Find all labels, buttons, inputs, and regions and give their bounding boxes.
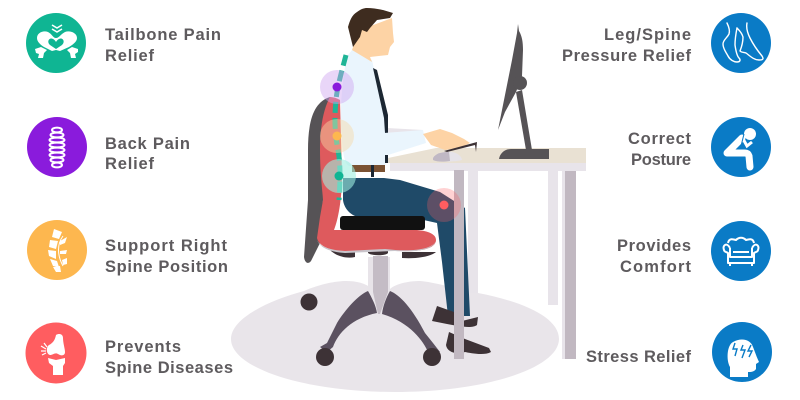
label: Back Pain Relief: Back Pain xyxy=(105,135,190,153)
label: Leg/Spine Pressure Relief: Leg/Spine xyxy=(604,26,691,44)
icon: knee joint xyxy=(26,322,86,384)
icon: feet outlines xyxy=(711,13,771,73)
label: Support Right Spine Position: Spine Position xyxy=(105,258,228,276)
label: Support Right Spine Position xyxy=(105,237,228,276)
label: Prevents Spine Diseases xyxy=(105,338,233,377)
icon: pelvis xyxy=(26,13,86,73)
illustration: office chair xyxy=(300,97,441,366)
illustration: front desk leg xyxy=(454,170,464,359)
icon: sofa xyxy=(711,221,771,281)
panel: prevents spine diseases xyxy=(26,322,233,384)
label: Leg/Spine Pressure Relief xyxy=(562,26,692,65)
marker: upper back xyxy=(320,70,354,104)
panel: correct posture xyxy=(628,117,771,177)
label: Prevents Spine Diseases: Spine Diseases xyxy=(105,359,233,377)
marker: mid back xyxy=(320,119,354,153)
label: Tailbone Pain Relief: Tailbone Pain xyxy=(105,26,221,44)
label: Provides Comfort: Provides xyxy=(617,237,691,255)
label: Provides Comfort: Comfort xyxy=(620,258,692,276)
label: Provides Comfort xyxy=(617,237,692,276)
label: Tailbone Pain Relief xyxy=(105,26,221,65)
label: Leg/Spine Pressure Relief: Pressure Relief xyxy=(562,47,692,65)
illustration: desk xyxy=(388,148,586,359)
panel: leg/spine pressure relief xyxy=(562,13,771,73)
illustration: monitor xyxy=(498,24,549,159)
label: Back Pain Relief xyxy=(105,135,190,173)
panel: provides comfort xyxy=(617,221,771,281)
label: Correct Posture xyxy=(628,130,692,169)
illustration: spine dashed line xyxy=(335,55,346,200)
illustration: seated man xyxy=(340,8,491,354)
label: Tailbone Pain Relief: Relief xyxy=(105,47,154,65)
icon: head with lightning xyxy=(712,322,772,382)
label: Correct Posture: Correct xyxy=(628,130,692,148)
label: Correct Posture: Posture xyxy=(631,151,691,169)
icon: curved spine xyxy=(27,220,87,280)
label: Stress Relief: Stress Relief xyxy=(586,348,692,366)
icon: spine column xyxy=(27,117,87,177)
illustration: mouse and keyboard xyxy=(433,142,477,162)
marker: lower back xyxy=(322,159,356,193)
marker: knee xyxy=(427,188,461,222)
illustration: floor shadow xyxy=(231,281,559,392)
icon: seated figure xyxy=(711,117,771,177)
label: Prevents Spine Diseases: Prevents xyxy=(105,338,181,356)
panel: stress relief xyxy=(586,322,772,382)
panel: tailbone pain relief xyxy=(26,13,221,73)
panel: back pain relief xyxy=(27,117,190,177)
label: Support Right Spine Position: Support Right xyxy=(105,237,228,255)
label: Back Pain Relief: Relief xyxy=(105,155,154,173)
panel: support right spine position xyxy=(27,220,228,280)
